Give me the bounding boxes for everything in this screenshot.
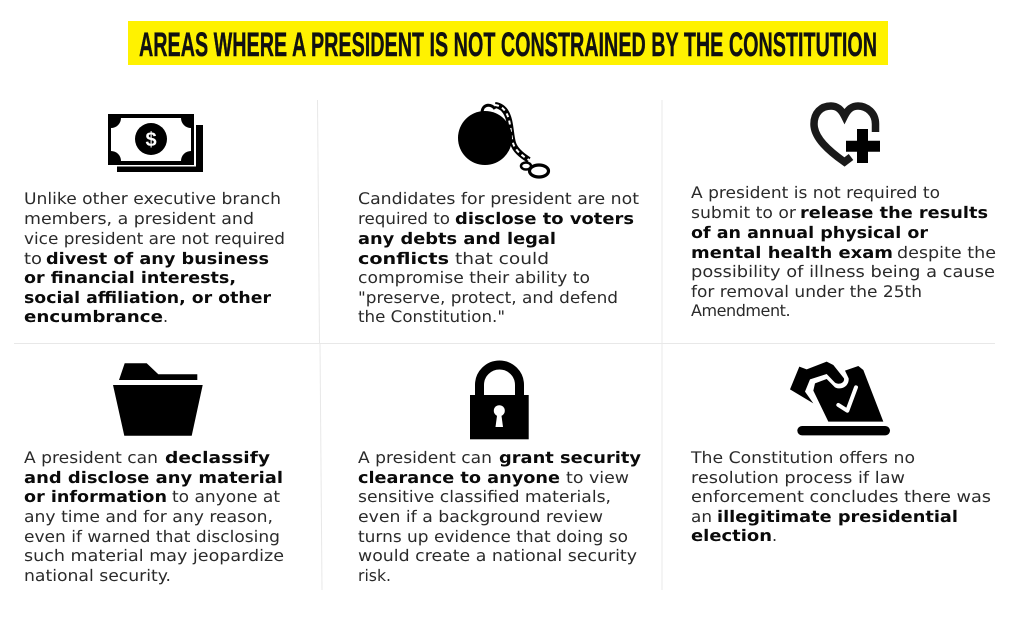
text: security clearance: clearance to anyone <box>358 468 560 487</box>
text: security clearance: grant security <box>499 448 642 467</box>
text: declassify material: A president can <box>24 448 158 467</box>
text: disclose debts: disclose to voters <box>455 209 634 228</box>
text: divest: vice president are not required <box>24 229 285 248</box>
text: declassify material: even if warned that disclosing <box>24 527 280 546</box>
text: declassify material: to anyone at <box>172 487 280 506</box>
text: divest: divest of any business <box>46 249 269 268</box>
text: health results: A president is not required to <box>691 183 940 202</box>
text: divest: Unlike other executive branch <box>24 189 281 208</box>
icon: ballot box <box>790 362 890 435</box>
text: no resolution process: The Constitution offers no <box>690 448 915 467</box>
icon: folder <box>113 363 203 436</box>
text: declassify material: such material may jeopardize <box>24 546 284 565</box>
text: divest <box>24 189 285 326</box>
text: no resolution process: . <box>772 526 777 545</box>
icon: padlock <box>470 365 529 439</box>
text: health results <box>691 183 996 320</box>
text: disclose debts: the Constitution." <box>358 307 505 326</box>
text: divest: social affiliation, or other <box>24 288 271 307</box>
text: declassify material: any time and for any reason, <box>24 507 273 526</box>
text: no resolution process <box>690 448 991 545</box>
text: health results: Amendment. <box>691 301 790 320</box>
text: no resolution process: election <box>691 526 772 545</box>
text: health results: of an annual physical or <box>691 223 928 242</box>
panel: health exam <box>691 106 996 320</box>
text: no resolution process: enforcement concludes there was <box>691 487 991 506</box>
text: health results: possibility of illness being a cause <box>691 262 995 281</box>
text: disclose debts: any debts and legal <box>358 229 556 248</box>
text: health results: release the results <box>800 203 988 222</box>
text: no resolution process: an <box>691 507 712 526</box>
text: divest: members, a president and <box>24 209 254 228</box>
text: disclose debts: conflicts <box>358 249 449 268</box>
text: disclose debts: Candidates for president are not <box>358 189 639 208</box>
text: disclose debts: "preserve, protect, and defend <box>358 288 618 307</box>
icon: money bills: $ <box>145 129 157 151</box>
text: health results: for removal under the 25th <box>691 282 922 301</box>
text: declassify material <box>24 448 284 585</box>
panel: debts and legal conflicts <box>358 105 639 326</box>
text: divest: to <box>24 249 42 268</box>
text: health results: submit to or <box>691 203 796 222</box>
text: security clearance: even if a background review <box>358 507 603 526</box>
text: declassify material: and disclose any material <box>24 468 283 487</box>
text: security clearance <box>358 448 642 585</box>
text: security clearance: to view <box>566 468 629 487</box>
text: health results: mental health exam <box>691 243 893 262</box>
text: security clearance: sensitive classified materials, <box>358 487 611 506</box>
text: security clearance: turns up evidence that doing so <box>358 527 628 546</box>
text: declassify material: national security. <box>24 566 171 585</box>
icon: heart with plus <box>814 106 880 163</box>
panel: illegitimate election <box>690 362 991 545</box>
panel: security clearance <box>358 365 642 585</box>
text: disclose debts: required to <box>358 209 450 228</box>
text: declassify material: declassify <box>165 448 271 467</box>
text: divest: or financial interests, <box>24 268 236 287</box>
text: declassify material: or information <box>24 487 167 506</box>
text: security clearance: risk. <box>358 566 391 585</box>
text: divest: . <box>163 307 168 326</box>
text: no resolution process: resolution process if law <box>691 468 905 487</box>
icon: ball and chain <box>458 105 548 177</box>
panel: declassify <box>24 363 284 585</box>
text: disclose debts: compromise their ability to <box>358 268 590 287</box>
text: divest: encumbrance <box>24 307 163 326</box>
text: security clearance: A president can <box>358 448 492 467</box>
text: no resolution process: illegitimate presidential <box>717 507 958 526</box>
text: health results: despite the <box>897 243 996 262</box>
icon: money bills <box>108 114 203 172</box>
panel: financial interests <box>24 114 285 326</box>
text: disclose debts: that could <box>455 249 549 268</box>
text: security clearance: would create a national security <box>358 546 637 565</box>
text: disclose debts <box>358 189 639 326</box>
